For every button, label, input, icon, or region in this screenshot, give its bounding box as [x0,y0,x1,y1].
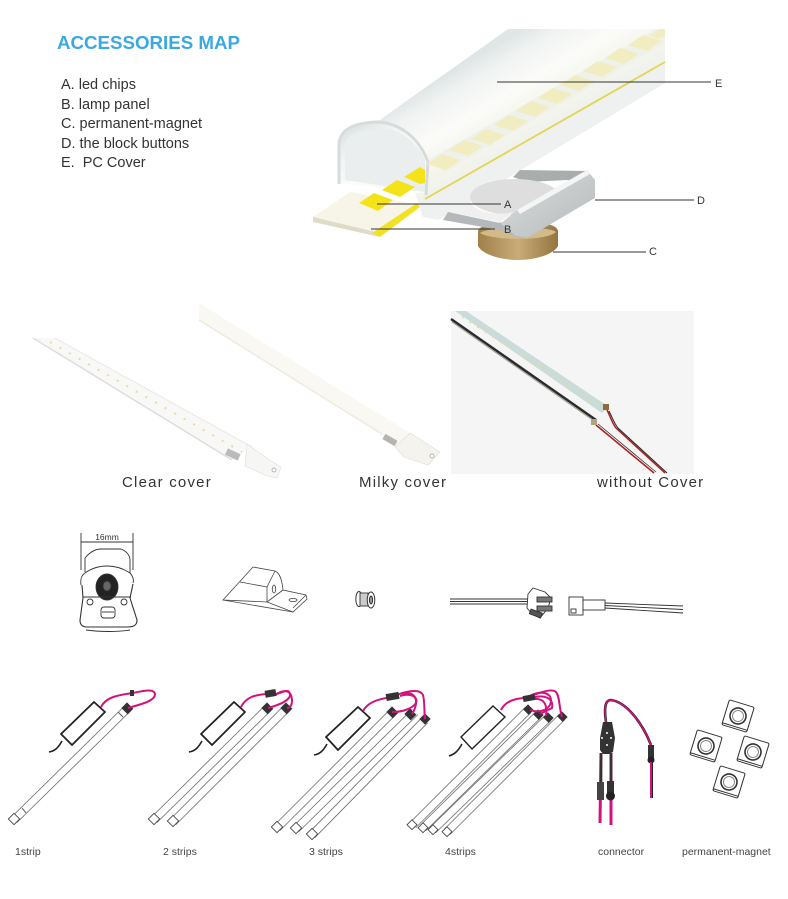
diagram: connector cable [597,700,654,825]
lamp panel [313,192,420,237]
icon: end view profile 16mm [80,532,137,632]
parts list [61,77,202,171]
diagram: 4 strips wiring [407,690,568,837]
photo: milky cover bar [199,303,440,465]
leader lines and letters: D [697,195,705,207]
icon: rubber grommet [356,592,375,608]
icon: permanent magnets [690,700,769,798]
leader lines and letters [371,78,722,258]
block button clip [443,170,595,238]
label: 2 strips: 2 strips [163,846,197,858]
icon: mounting bracket [223,567,307,612]
diagram: 3 strips wiring [271,691,431,840]
leader lines and letters: E [715,78,722,90]
label: permanent-magnet: permanent-magnet [682,846,771,858]
label: connector: connector [598,846,645,858]
leader lines and letters: B [504,224,511,236]
icon: end view profile 16mm: 16mm [95,532,119,542]
title: ACCESSORIES MAP [57,33,240,53]
caption: milky cover: Milky cover [359,474,447,491]
label: 1 strip: 1strip [15,846,41,858]
label: 3 strips: 3 strips [309,846,343,858]
diagram: 2 strips wiring [148,689,292,827]
leader lines and letters: C [649,246,657,258]
diagram: exploded LED bar [313,29,722,260]
leader lines and letters: A [504,199,512,211]
parts list: E. PC Cover [61,155,146,171]
photo: clear cover bar [33,338,281,478]
parts list: A. led chips [61,77,136,93]
parts list: B. lamp panel [61,97,150,113]
caption: without cover: without Cover [596,474,704,491]
parts list: D. the block buttons [61,136,189,152]
label: 4 strips: 4strips [445,846,476,858]
pale LED chips [427,29,665,170]
LED chips [359,167,425,211]
icon: wire plug and socket [450,588,683,618]
caption: clear cover: Clear cover [122,474,212,491]
photo: bar without cover [451,311,694,474]
parts list: C. permanent-magnet [61,116,202,132]
diagram: 1 strip wiring [8,690,155,825]
magnet [478,222,558,260]
PC cover [338,29,665,220]
